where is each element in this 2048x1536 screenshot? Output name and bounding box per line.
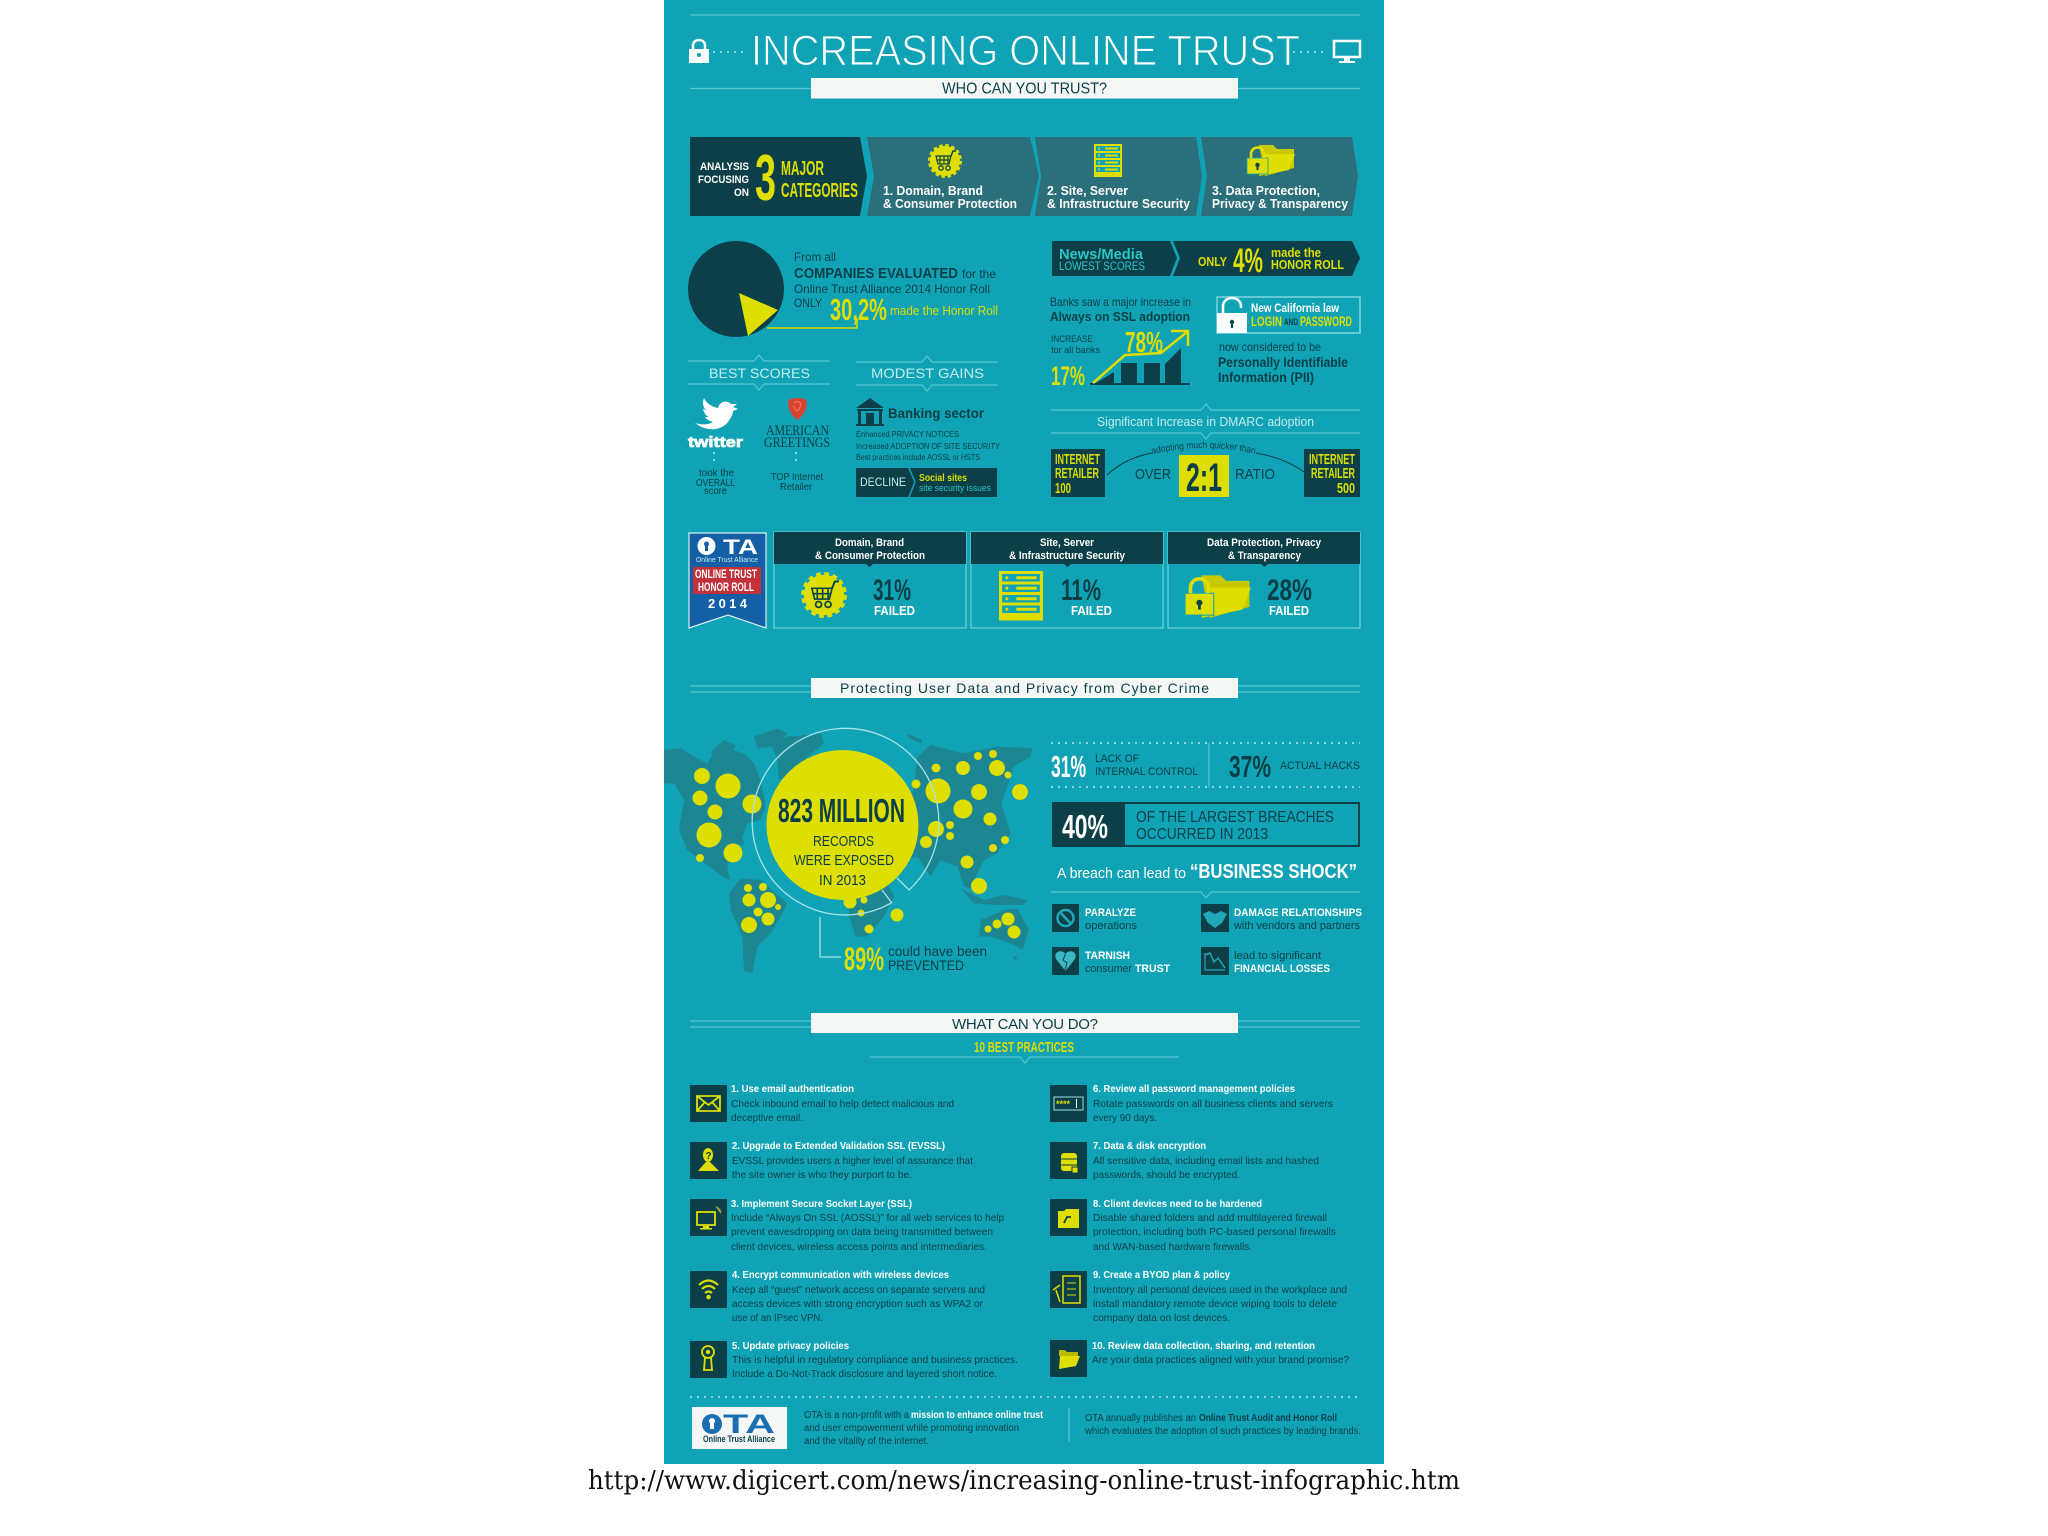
category 2: 2. Site, Server xyxy=(1047,183,1128,198)
category 1: & Consumer Protection xyxy=(883,196,1017,211)
stats: internal control vs hacks: INTERNAL CONTROL xyxy=(1095,766,1198,778)
stat box: 40% of breaches xyxy=(1052,802,1359,847)
decline bar: site security issues xyxy=(919,483,991,494)
practice 6: Rotate passwords on all business clients and servers xyxy=(1093,1098,1333,1110)
practice 6: 6. Review all password management policies xyxy=(1093,1083,1295,1095)
stats: internal control vs hacks: 37% xyxy=(1229,749,1271,784)
card: site failure rate: & Infrastructure Security xyxy=(1009,550,1126,562)
title: INCREASING ONLINE TRUST xyxy=(751,27,1300,75)
category 1: 1. Domain, Brand xyxy=(883,183,983,198)
card: domain failure rate: Domain, Brand xyxy=(835,537,904,549)
item: damage relationships: DAMAGE RELATIONSHIPS xyxy=(1234,907,1362,919)
ratio: OVER xyxy=(1135,466,1171,483)
OTA honor roll badge: 2014 xyxy=(708,596,748,611)
item: paralyze xyxy=(1052,904,1138,932)
text: companies evaluated: for the xyxy=(962,267,996,281)
callout: 89% preventable: could have been xyxy=(888,943,987,959)
practice 5: This is helpful in regulatory compliance and business practices. xyxy=(732,1354,1018,1366)
practice 7 xyxy=(1050,1140,1319,1181)
practice 5: 5. Update privacy policies xyxy=(732,1340,849,1352)
banks SSL adoption chart xyxy=(1050,295,1191,391)
practice 1: deceptive email. xyxy=(731,1112,803,1124)
footer text: about OTA: OTA is a non-profit with a xyxy=(804,1410,909,1421)
source URL caption: http://www.digicert.com/news/increasing-online-trust-infographic.htm xyxy=(588,1466,1460,1496)
panel: DMARC adoption xyxy=(1051,403,1360,500)
practice 9: Inventory all personal devices used in the workplace and xyxy=(1093,1284,1347,1296)
card: site failure rate xyxy=(971,532,1163,628)
california law callout xyxy=(1217,297,1360,385)
panel: modest gains: Banking sector xyxy=(888,405,985,421)
heading: business shock: “BUSINESS SHOCK” xyxy=(1190,861,1357,883)
right retailer box xyxy=(1304,449,1360,497)
news/media banner: LOWEST SCORES xyxy=(1059,261,1145,273)
panel: modest gains: MODEST GAINS xyxy=(871,365,984,381)
item: paralyze: operations xyxy=(1085,920,1138,932)
banks SSL adoption chart: INCREASE xyxy=(1051,334,1093,345)
footer text: audit xyxy=(1084,1413,1361,1437)
practice 4: access devices with strong encryption such as WPA2 or xyxy=(732,1298,983,1310)
pie chart: honor roll share xyxy=(688,241,857,337)
practice 6: **** xyxy=(1056,1099,1071,1109)
practice 10: 10. Review data collection, sharing, and retention xyxy=(1092,1340,1315,1352)
practice 6 xyxy=(1050,1083,1333,1124)
ratio: 2:1 xyxy=(1186,456,1222,500)
california law callout: New California law xyxy=(1251,301,1340,315)
category 3: 3. Data Protection, xyxy=(1212,183,1320,198)
card: domain failure rate: & Consumer Protection xyxy=(815,550,925,562)
icon: cart badge xyxy=(930,146,960,176)
stats: internal control vs hacks: LACK OF xyxy=(1095,753,1139,765)
practice 9: install mandatory remote device wiping tools to delete xyxy=(1093,1298,1337,1310)
panel: modest gains xyxy=(856,356,1000,497)
icon: server xyxy=(1094,144,1122,177)
news/media banner: ONLY xyxy=(1198,254,1227,269)
item: financial losses xyxy=(1201,947,1330,975)
intro arrow xyxy=(690,137,867,216)
item: tarnish trust: consumer xyxy=(1085,963,1132,975)
icon: cart badge xyxy=(803,574,845,616)
category 3 xyxy=(1201,137,1358,216)
footer text: audit: Online Trust Audit and Honor Roll xyxy=(1199,1413,1337,1424)
section heading: what can you do: WHAT CAN YOU DO? xyxy=(952,1016,1098,1033)
news/media banner: News/Media xyxy=(1059,246,1144,263)
panel: 3 major categories xyxy=(690,137,1358,216)
big stat circle: 823 million: WERE EXPOSED xyxy=(794,853,894,869)
practice 4: 4. Encrypt communication with wireless devices xyxy=(732,1269,949,1281)
practice 10 xyxy=(1050,1340,1349,1377)
panel: best scores: score xyxy=(704,486,727,497)
world map with breach dots xyxy=(664,728,1032,973)
text: companies evaluated: Online Trust Alliance 2014 Honor Roll xyxy=(794,282,990,296)
right retailer box: 500 xyxy=(1337,480,1355,497)
practice 7: 7. Data & disk encryption xyxy=(1093,1140,1206,1152)
practice 3: client devices, wireless access points and intermediaries. xyxy=(731,1241,987,1253)
practice 4: use of an IPsec VPN. xyxy=(732,1312,823,1324)
footer text: about OTA: and user empowerment while promoting innovation xyxy=(804,1423,1019,1434)
panel: modest gains: Best practices include AOSSL or HSTS xyxy=(856,452,980,462)
left retailer box: INTERNET xyxy=(1055,451,1100,468)
news/media banner xyxy=(1052,241,1360,280)
practice 7: All sensitive data, including email lists and hashed xyxy=(1093,1155,1319,1167)
panel: best scores: Retailer xyxy=(780,482,813,493)
category 2: & Infrastructure Security xyxy=(1047,196,1191,211)
footer OTA logo xyxy=(692,1407,787,1449)
footer text: about OTA: and the vitality of the internet. xyxy=(804,1436,929,1447)
news/media banner: made the xyxy=(1271,245,1321,260)
card: site failure rate: 11% xyxy=(1061,574,1101,607)
left retailer box xyxy=(1051,449,1105,497)
decline bar: DECLINE xyxy=(860,475,906,489)
panel: best scores xyxy=(688,355,830,497)
subheading: 10 best practices xyxy=(870,1039,1179,1063)
practice 4: Keep all “guest” network access on separate servers and xyxy=(732,1284,985,1296)
footer OTA logo: TA xyxy=(723,1409,775,1439)
panel: best scores: TOP Internet xyxy=(771,472,823,483)
practice 8: 8. Client devices need to be hardened xyxy=(1093,1198,1262,1210)
text: companies evaluated: made the Honor Roll xyxy=(890,304,998,318)
icon: american greetings rose xyxy=(788,398,807,420)
big stat circle: 823 million xyxy=(752,728,939,915)
banks SSL adoption chart: 17% xyxy=(1051,361,1085,391)
practice 5 xyxy=(690,1340,1018,1380)
section heading: what can you do xyxy=(690,1013,1360,1033)
stats: internal control vs hacks: 31% xyxy=(1051,749,1086,784)
california law callout: LOGIN xyxy=(1251,313,1282,329)
card: data protection failure rate: & Transparency xyxy=(1228,550,1302,562)
panel: best scores: took the xyxy=(699,468,734,479)
practice 2: ? xyxy=(706,1151,712,1162)
practice 1 xyxy=(690,1083,954,1124)
ratio: RATIO xyxy=(1235,466,1275,483)
subtitle banner xyxy=(811,78,1238,98)
icon: open lock xyxy=(1217,298,1247,333)
practice 2 xyxy=(690,1140,973,1181)
practice 4 xyxy=(690,1269,985,1324)
practice 7: passwords, should be encrypted. xyxy=(1093,1169,1240,1181)
panel: best scores: AMERICAN xyxy=(766,423,829,439)
item: tarnish trust: TARNISH xyxy=(1085,950,1130,962)
california law callout: now considered to be xyxy=(1219,340,1321,354)
subtitle banner: WHO CAN YOU TRUST? xyxy=(942,80,1107,98)
stat box: 40% of breaches: OCCURRED IN 2013 xyxy=(1136,826,1268,843)
practice 10: Are your data practices aligned with your brand promise? xyxy=(1092,1354,1349,1366)
item: damage relationships xyxy=(1201,904,1362,932)
teal infographic background panel xyxy=(664,0,1384,1464)
practice 8 xyxy=(1050,1198,1336,1253)
OTA honor roll badge: ONLINE TRUST xyxy=(695,569,757,581)
stats: internal control vs hacks: ACTUAL HACKS xyxy=(1280,760,1360,772)
card: site failure rate: Site, Server xyxy=(1040,537,1095,549)
left retailer box: 100 xyxy=(1055,480,1071,497)
panel: best scores: twitter xyxy=(688,434,743,451)
practice 9: company data on lost devices. xyxy=(1093,1312,1230,1324)
icon: server xyxy=(999,571,1043,620)
text: companies evaluated: 30,2% xyxy=(830,292,887,327)
practice 3: 3. Implement Secure Socket Layer (SSL) xyxy=(731,1198,912,1210)
california law callout: Information (PII) xyxy=(1218,370,1314,385)
section heading: cyber crime: Protecting User Data and Privacy from Cyber Crime xyxy=(840,680,1209,696)
card: data protection failure rate: 28% xyxy=(1267,574,1312,607)
header xyxy=(689,15,1360,98)
text: companies evaluated: ONLY xyxy=(794,296,822,310)
footer text: about OTA: mission to enhance online trust xyxy=(911,1410,1044,1421)
practice 5: Include a Do-Not-Track disclosure and layered short notice. xyxy=(732,1368,997,1380)
item: tarnish trust: TRUST xyxy=(1135,963,1170,975)
decline bar xyxy=(856,468,997,497)
california law callout: Personally Identifiable xyxy=(1218,355,1348,370)
practice 3: Include “Always On SSL (AOSSL)” for all web services to help xyxy=(731,1212,1004,1224)
practice 8: and WAN-based hardware firewalls. xyxy=(1093,1241,1252,1253)
category 3: Privacy & Transparency xyxy=(1212,196,1349,211)
card: data protection failure rate xyxy=(1168,532,1360,628)
banks SSL adoption chart: Always on SSL adoption xyxy=(1050,309,1190,324)
panel: DMARC adoption: adopting much quicker than xyxy=(1152,441,1256,454)
section heading: cyber crime xyxy=(690,678,1360,698)
icon: folder with lock xyxy=(1185,575,1251,618)
footer text: about OTA xyxy=(804,1410,1044,1447)
card: site failure rate: FAILED xyxy=(1071,604,1112,618)
stat box: 40% of breaches: OF THE LARGEST BREACHES xyxy=(1136,809,1334,826)
right retailer box: INTERNET xyxy=(1309,451,1355,468)
card: domain failure rate xyxy=(774,532,966,628)
practice 1: Check inbound email to help detect malicious and xyxy=(731,1098,954,1110)
text: companies evaluated xyxy=(794,250,998,327)
callout: 89% preventable: PREVENTED xyxy=(888,957,964,973)
item: financial losses: lead to significant xyxy=(1234,950,1321,962)
intro arrow: CATEGORIES xyxy=(781,180,858,202)
panel: best scores: GREETINGS xyxy=(764,435,830,451)
card: domain failure rate: 31% xyxy=(873,574,911,607)
intro arrow: FOCUSING xyxy=(698,174,749,186)
item: damage relationships: with vendors and partners xyxy=(1233,920,1360,932)
banks SSL adoption chart: Banks saw a major increase in xyxy=(1050,295,1191,309)
footer OTA logo: Online Trust Alliance xyxy=(703,1434,775,1445)
news/media banner: 4% xyxy=(1233,242,1263,280)
california law callout: AND xyxy=(1284,317,1298,327)
panel: modest gains: Increased ADOPTION OF SITE SECURITY xyxy=(856,441,1000,451)
california law callout: PASSWORD xyxy=(1300,313,1352,329)
card: data protection failure rate: FAILED xyxy=(1269,604,1309,618)
panel: DMARC adoption: Significant Increase in DMARC adoption xyxy=(1097,415,1314,429)
practice 3: prevent eavesdropping on data being transmitted between xyxy=(731,1226,993,1238)
big stat circle: 823 million: RECORDS xyxy=(813,834,874,850)
stat box: 40% of breaches: 40% xyxy=(1062,808,1108,845)
icon: twitter bird xyxy=(695,398,738,429)
footer text: audit: OTA annually publishes an xyxy=(1085,1413,1196,1424)
heading: business shock xyxy=(1051,861,1360,898)
card: domain failure rate: FAILED xyxy=(874,604,915,618)
big stat circle: 823 million: IN 2013 xyxy=(819,873,866,889)
banks SSL adoption chart: 78% xyxy=(1125,327,1163,359)
practice 6: every 90 days. xyxy=(1093,1112,1157,1124)
text: companies evaluated: From all xyxy=(794,250,836,264)
right retailer box: RETAILER xyxy=(1311,465,1355,482)
category 1 xyxy=(867,137,1039,216)
decline bar: Social sites xyxy=(919,472,967,484)
callout: 89% preventable: 89% xyxy=(844,941,884,977)
item: financial losses: FINANCIAL LOSSES xyxy=(1234,963,1330,975)
ratio xyxy=(1135,455,1275,500)
panel: modest gains: Enhanced PRIVACY NOTICES xyxy=(856,429,959,439)
item: tarnish trust xyxy=(1052,947,1170,975)
practice 2: the site owner is who they purport to be. xyxy=(732,1169,912,1181)
icon: monitor xyxy=(1334,41,1360,63)
icon: folder with lock xyxy=(1247,145,1295,176)
OTA honor roll badge: HONOR ROLL xyxy=(698,582,754,594)
stats: internal control vs hacks xyxy=(1051,743,1360,787)
subheading: 10 best practices: 10 BEST PRACTICES xyxy=(974,1039,1074,1056)
news/media banner: HONOR ROLL xyxy=(1271,257,1344,272)
practice 8: protection, including both PC-based personal firewalls xyxy=(1093,1226,1336,1238)
category 2 xyxy=(1035,137,1202,216)
icon: padlock xyxy=(689,40,709,63)
intro arrow: 3 xyxy=(755,141,776,214)
practice 2: 2. Upgrade to Extended Validation SSL (EVSSL) xyxy=(732,1140,945,1152)
left retailer box: RETAILER xyxy=(1055,465,1099,482)
intro arrow: ANALYSIS xyxy=(700,161,749,173)
text: companies evaluated: COMPANIES EVALUATED xyxy=(794,265,958,282)
footer text: audit: which evaluates the adoption of such practices by leading brands. xyxy=(1084,1426,1361,1437)
card: data protection failure rate: Data Protection, Privacy xyxy=(1207,537,1322,549)
practice 2: EVSSL provides users a higher level of assurance that xyxy=(732,1155,973,1167)
panel: best scores: OVERALL xyxy=(696,478,735,489)
OTA honor roll badge: Online Trust Alliance xyxy=(696,557,758,564)
intro arrow: ON xyxy=(734,187,749,199)
practice 9: 9. Create a BYOD plan & policy xyxy=(1093,1269,1230,1281)
practice 1: 1. Use email authentication xyxy=(731,1083,854,1095)
big stat circle: 823 million: 823 MILLION xyxy=(778,792,905,829)
heading: business shock: A breach can lead to xyxy=(1057,865,1186,882)
practice 9 xyxy=(1050,1269,1347,1324)
banks SSL adoption chart: for all banks xyxy=(1051,345,1100,356)
practice 8: Disable shared folders and add multilayered firewall xyxy=(1093,1212,1327,1224)
OTA honor roll badge xyxy=(689,533,766,628)
panel: best scores: BEST SCORES xyxy=(709,365,810,381)
callout: 89% preventable xyxy=(820,917,987,977)
intro arrow: MAJOR xyxy=(781,158,824,180)
item: paralyze: PARALYZE xyxy=(1085,907,1136,919)
OTA honor roll badge: TA xyxy=(723,536,758,559)
icon: bank xyxy=(856,398,884,426)
practice 3 xyxy=(690,1198,1004,1253)
